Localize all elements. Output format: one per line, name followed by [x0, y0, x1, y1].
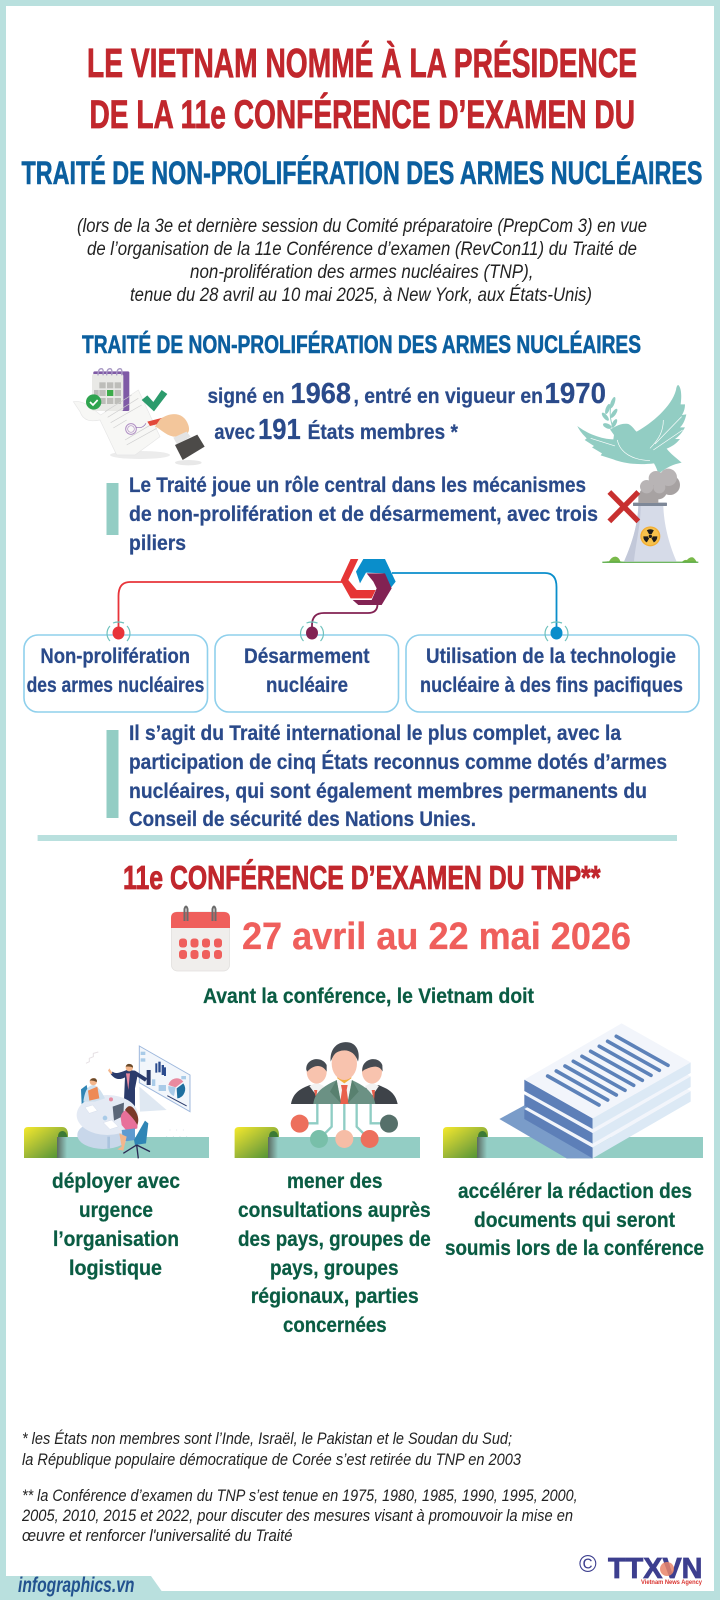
action: logistics: déployer avec [52, 1170, 180, 1193]
text block: most complete treaty: participation de cinq États reconnus comme dotés d’armes [129, 749, 667, 774]
treaty dates [208, 378, 606, 446]
panel: peaceful use: nucléaire à des fins pacifiques [420, 674, 683, 697]
icon: signing document [73, 369, 205, 465]
footnote: non-members: * les États non membres sont l’Inde, Israël, le Pakistan et le Soudan du Sud; [22, 1429, 512, 1448]
banner: logistics [24, 1127, 209, 1158]
title [87, 40, 637, 137]
icon: dove over nuclear plant [577, 385, 698, 563]
action: consultations: pays, groupes [270, 1257, 398, 1280]
treaty dates: 1970 [544, 378, 606, 410]
panel: peaceful use [406, 635, 699, 712]
footer tab: infographics.vn [18, 1574, 134, 1597]
icon: three pillars logo [341, 559, 396, 605]
connector dots [107, 622, 568, 641]
footnote: past conferences: 2005, 2010, 2015 et 2022, pour discuter des mesures visant à promouvoir la mise en [21, 1507, 573, 1525]
text block: most complete treaty [106, 721, 667, 831]
intro text: non-prolifération des armes nucléaires (TNP), [190, 262, 534, 283]
icon: consultation group [291, 1042, 398, 1148]
panel: disarmament [215, 635, 398, 712]
footnote: past conferences: œuvre et renforcer l'universalité du Traité [22, 1527, 292, 1545]
logo: TTXVN: © [579, 1551, 597, 1578]
panel: peaceful use: Utilisation de la technologie [426, 645, 676, 668]
action: logistics: l’organisation [53, 1228, 179, 1251]
panel: non-proliferation: des armes nucléaires [27, 674, 204, 697]
text block: central role: Le Traité joue un rôle central dans les mécanismes [129, 473, 586, 497]
banner: consultations [235, 1127, 420, 1158]
action: consultations: régionaux, parties [251, 1285, 419, 1308]
action: consultations [238, 1170, 431, 1337]
intro text: de l’organisation de la 11e Conférence d’examen (RevCon11) du Traité de [87, 239, 637, 260]
icon: team meeting [77, 1046, 190, 1158]
logo: TTXVN: Vietnam News Agency [641, 1579, 702, 1586]
logo: TTXVN [579, 1551, 702, 1586]
action: documents: documents qui seront [474, 1209, 675, 1232]
treaty dates: , entré en vigueur en [354, 384, 543, 408]
action: documents [445, 1180, 704, 1260]
action: consultations: mener des [287, 1170, 382, 1193]
footnote: non-members: la République populaire démocratique de Corée s’est retirée du TNP en 2003 [22, 1451, 522, 1469]
footnote: past conferences [21, 1487, 578, 1545]
footnote: non-members [22, 1429, 522, 1469]
action: consultations: concernées [283, 1314, 387, 1337]
panel: non-proliferation [24, 635, 208, 712]
action: documents: accélérer la rédaction des [458, 1180, 692, 1203]
panel: disarmament: Désarmement [244, 645, 370, 668]
text block: most complete treaty: Conseil de sécurité des Nations Unies. [129, 807, 476, 831]
action: logistics [52, 1170, 180, 1280]
treaty dates: États membres * [308, 419, 459, 444]
panel: non-proliferation: Non-prolifération [40, 645, 190, 668]
text block: central role: de non-prolifération et de désarmement, avec trois [129, 502, 598, 526]
text block: most complete treaty: Il s’agit du Traité international le plus complet, avec la [129, 721, 622, 745]
action: logistics: logistique [69, 1257, 162, 1280]
panel: disarmament: nucléaire [266, 674, 348, 697]
logo: TTXVN: TTXVN [608, 1553, 702, 1585]
treaty dates: avec [214, 420, 255, 444]
treaty dates: 191 [258, 414, 301, 446]
action: logistics: urgence [79, 1199, 153, 1222]
banner: documents [443, 1127, 703, 1158]
lead-in text: Avant la conférence, le Vietnam doit [203, 985, 534, 1008]
icon: document stack [499, 1023, 691, 1158]
treaty dates: 1968 [290, 378, 351, 410]
intro text [77, 216, 647, 306]
intro text: tenue du 28 avril au 10 mai 2025, à New York, aux États-Unis) [130, 285, 592, 306]
action: consultations: des pays, groupes de [238, 1228, 431, 1251]
intro text: (lors de la 3e et dernière session du Comité préparatoire (PrepCom 3) en vue [77, 216, 647, 237]
conference dates: 27 avril au 22 mai 2026 [242, 916, 631, 958]
text block: most complete treaty: nucléaires, qui sont également membres permanents du [129, 779, 647, 803]
treaty dates: signé en [208, 384, 284, 408]
footnote: past conferences: ** la Conférence d’examen du TNP s’est tenue en 1975, 1980, 1985, 1990, 1995, 2000, [22, 1487, 578, 1505]
connector lines [118, 573, 556, 628]
icon: calendar [171, 906, 230, 971]
text block: central role [106, 473, 598, 555]
text block: central role: piliers [129, 531, 186, 555]
action: consultations: consultations auprès [238, 1199, 431, 1222]
